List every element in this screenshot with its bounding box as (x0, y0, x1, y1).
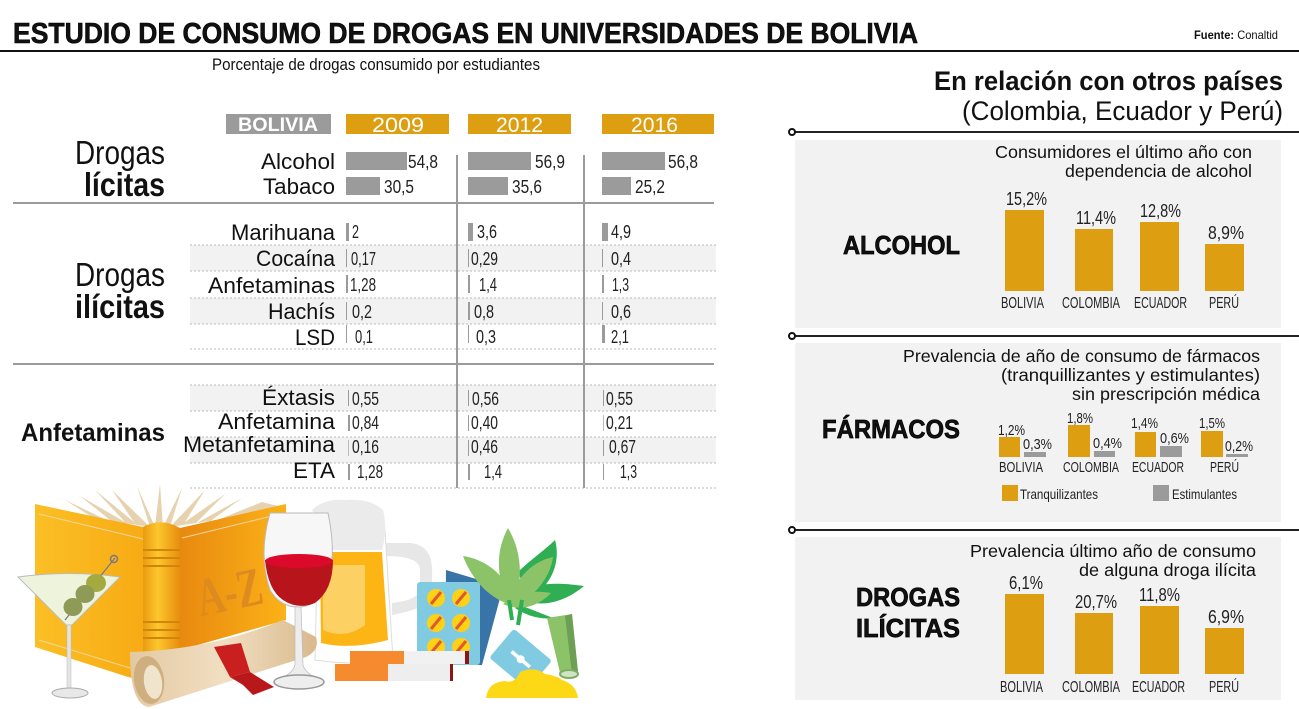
row: ETA: 1,28 (357, 462, 383, 482)
row: Alcohol: 54,8 (408, 152, 438, 172)
source: Fuente: Conaltid (1194, 28, 1278, 42)
bar chart: alcohol: BOLIVIA (1001, 295, 1044, 312)
bar chart: drogas: ECUADOR (1132, 679, 1185, 696)
row: Extasis: 0,55 (352, 389, 379, 409)
icon: pill blister (417, 570, 503, 665)
bar chart: alcohol: 15,2% (1006, 188, 1047, 209)
row: Marihuana: Marihuana (231, 220, 336, 245)
bar chart: farmacos: 1,2% (998, 422, 1025, 439)
heading: anfetaminas: Anfetaminas (21, 419, 165, 447)
row: Extasis: 0,55 (606, 389, 633, 409)
legend: Tranquilizantes (1020, 486, 1098, 502)
row: ETA: 1,3 (620, 462, 637, 482)
heading: other countries (934, 66, 1283, 126)
chart title: sin prescripción médica (1072, 384, 1260, 404)
row: Alcohol (261, 149, 698, 174)
chart title: dependencia de alcohol (1065, 161, 1252, 181)
heading: drogas licitas (75, 134, 165, 203)
icon: diploma scroll (130, 620, 317, 707)
heading: alcohol: ALCOHOL (843, 230, 960, 260)
chart title (903, 346, 1260, 404)
subtitle: Porcentaje de drogas consumido por estudiantes (212, 55, 540, 74)
heading: drogas ilicitas: Drogas (75, 256, 165, 293)
row: Extasis (262, 385, 633, 410)
row: Anfetamina: 0,21 (606, 413, 633, 433)
row: Marihuana: 2 (352, 222, 359, 242)
bar chart: drogas (1000, 572, 1244, 696)
header: 2016 (602, 114, 714, 137)
row: Tabaco: 35,6 (512, 177, 542, 197)
bar chart: farmacos: 1,4% (1131, 415, 1158, 432)
icon: rolled tube (547, 614, 578, 678)
bar chart: drogas: 11,8% (1139, 584, 1180, 605)
row: Anfetaminas: Anfetaminas (208, 273, 335, 298)
row: Cocaina: Cocaína (256, 246, 336, 271)
row: Cocaina (256, 246, 631, 271)
row: Tabaco: Tabaco (263, 174, 335, 199)
row: Extasis: 0,56 (472, 389, 499, 409)
bar chart: farmacos: 0,4% (1093, 435, 1122, 452)
bar chart: farmacos: 1,8% (1067, 410, 1093, 427)
icon: cannabis leaf (463, 528, 584, 625)
bar chart: farmacos (998, 410, 1253, 476)
row: Anfetamina: 0,40 (471, 413, 498, 433)
divider marker (789, 129, 1299, 135)
row: Anfetaminas: 1,4 (479, 275, 497, 295)
row: Metanfetamina: 0,67 (609, 437, 636, 457)
header: 2012: 2012 (496, 114, 543, 137)
row: Anfetamina: 0,84 (352, 413, 379, 433)
row: Extasis: Éxtasis (262, 385, 335, 410)
heading: drogas licitas: lícitas (84, 166, 165, 203)
bar chart: drogas: COLOMBIA (1062, 679, 1120, 696)
header: 2016: 2016 (631, 114, 678, 137)
row: Alcohol: 56,9 (535, 152, 565, 172)
divider marker (789, 333, 1299, 339)
chart title: Prevalencia de año de consumo de fármacos (903, 346, 1260, 366)
bar chart: alcohol (1001, 188, 1244, 312)
header: 2012 (468, 114, 571, 137)
icon: book (35, 484, 286, 680)
bar chart: farmacos: BOLIVIA (999, 459, 1043, 476)
chart title: Prevalencia último año de consumo (970, 541, 1256, 561)
row: Hachis: 0,6 (611, 302, 631, 322)
heading: drogas licitas: Drogas (75, 134, 165, 171)
row: Anfetaminas: 1,3 (612, 275, 629, 295)
panel: farmacos (795, 343, 1281, 522)
bar chart: drogas: 20,7% (1075, 591, 1117, 612)
row: Hachis: 0,8 (474, 302, 494, 322)
row: Tabaco: 30,5 (384, 177, 414, 197)
bar chart: alcohol: 12,8% (1140, 200, 1181, 221)
bar chart: alcohol: 8,9% (1208, 222, 1244, 243)
panel: drogas ilicitas (795, 537, 1281, 700)
row: LSD: 0,1 (355, 327, 373, 347)
row: Anfetaminas (208, 273, 629, 298)
heading: drogas ilicitas (856, 582, 960, 643)
row: Tabaco (263, 174, 665, 199)
icon: book: A-Z (191, 556, 268, 628)
bar chart: farmacos: 0,6% (1160, 430, 1189, 447)
row: Marihuana (231, 220, 631, 245)
header: 2009 (346, 114, 449, 137)
row: Anfetaminas: 1,28 (350, 275, 376, 295)
row: Alcohol: 56,8 (668, 152, 698, 172)
heading: drogas ilicitas: ilícitas (75, 288, 165, 325)
row: LSD (295, 325, 629, 350)
row: Marihuana: 4,9 (611, 222, 631, 242)
bar chart: farmacos: PERÚ (1210, 459, 1239, 476)
heading: drogas ilicitas: ILÍCITAS (856, 613, 960, 643)
icon: yellow powder (486, 669, 578, 698)
icon: wine glass (264, 513, 333, 689)
illustration: book, drinks, drugs (18, 484, 584, 707)
bar chart: farmacos: ECUADOR (1132, 459, 1184, 476)
row: Alcohol: Alcohol (261, 149, 335, 174)
bar chart: alcohol: ECUADOR (1134, 295, 1187, 312)
bar chart: alcohol: PERÚ (1209, 293, 1239, 312)
heading: farmacos: FÁRMACOS (822, 414, 960, 444)
row: Cocaina: 0,4 (611, 249, 631, 269)
header: Bolivia: BOLIVIA (238, 115, 318, 136)
chart title: (tranquillizantes y estimulantes) (1001, 365, 1260, 385)
chart title: de alguna droga ilícita (1079, 560, 1256, 580)
row: ETA (293, 458, 637, 483)
bar chart: drogas: 6,9% (1208, 606, 1244, 627)
row: ETA: 1,4 (484, 462, 502, 482)
bar chart: alcohol: 11,4% (1076, 207, 1116, 228)
bar chart: farmacos: 0,2% (1225, 438, 1253, 455)
bar chart: farmacos: COLOMBIA (1063, 459, 1119, 476)
row: LSD: 2,1 (611, 327, 629, 347)
row: LSD: LSD (295, 325, 335, 350)
heading: drogas ilicitas (75, 256, 165, 325)
panel: alcohol (795, 140, 1281, 328)
row: Metanfetamina: 0,46 (471, 437, 498, 457)
row: ETA: ETA (293, 458, 335, 483)
row: Hachis: Hachís (268, 299, 335, 324)
heading: drogas ilicitas: DROGAS (856, 582, 960, 612)
bar chart: drogas: PERÚ (1209, 677, 1239, 696)
icon: cigarettes (335, 651, 469, 681)
chart title (970, 541, 1256, 580)
row: Hachis (268, 299, 631, 324)
panel: Bolivia table (13, 114, 716, 488)
divider marker (789, 527, 1299, 533)
row: Hachis: 0,2 (352, 302, 372, 322)
icon: beer mug (312, 500, 432, 663)
row: Cocaina: 0,17 (351, 249, 376, 269)
heading: other countries: (Colombia, Ecuador y Perú) (962, 96, 1283, 126)
icon: razor blade (489, 629, 552, 690)
row: Tabaco: 25,2 (635, 177, 665, 197)
bar chart: farmacos: 1,5% (1199, 415, 1225, 432)
bar chart: alcohol: COLOMBIA (1062, 295, 1120, 312)
row: LSD: 0,3 (476, 327, 496, 347)
header: 2009: 2009 (372, 114, 424, 137)
row: Metanfetamina: 0,16 (352, 437, 379, 457)
bar chart: farmacos: 0,3% (1023, 436, 1052, 453)
legend (1002, 485, 1237, 502)
row: Anfetamina (218, 409, 633, 434)
heading: other countries: En relación con otros países (934, 66, 1283, 96)
row: Metanfetamina (183, 432, 636, 457)
title: ESTUDIO DE CONSUMO DE DROGAS EN UNIVERSIDADES DE BOLIVIA (13, 18, 918, 50)
icon: martini (18, 556, 120, 698)
row: Cocaina: 0,29 (471, 249, 498, 269)
chart title (995, 142, 1252, 181)
row: Marihuana: 3,6 (477, 222, 497, 242)
row: Anfetamina: Anfetamina (218, 409, 336, 434)
bar chart: drogas: BOLIVIA (1000, 679, 1043, 696)
bar chart: drogas: 6,1% (1009, 572, 1043, 593)
chart title: Consumidores el último año con (995, 142, 1252, 162)
row: Metanfetamina: Metanfetamina (183, 432, 336, 457)
legend: Estimulantes (1172, 486, 1237, 502)
